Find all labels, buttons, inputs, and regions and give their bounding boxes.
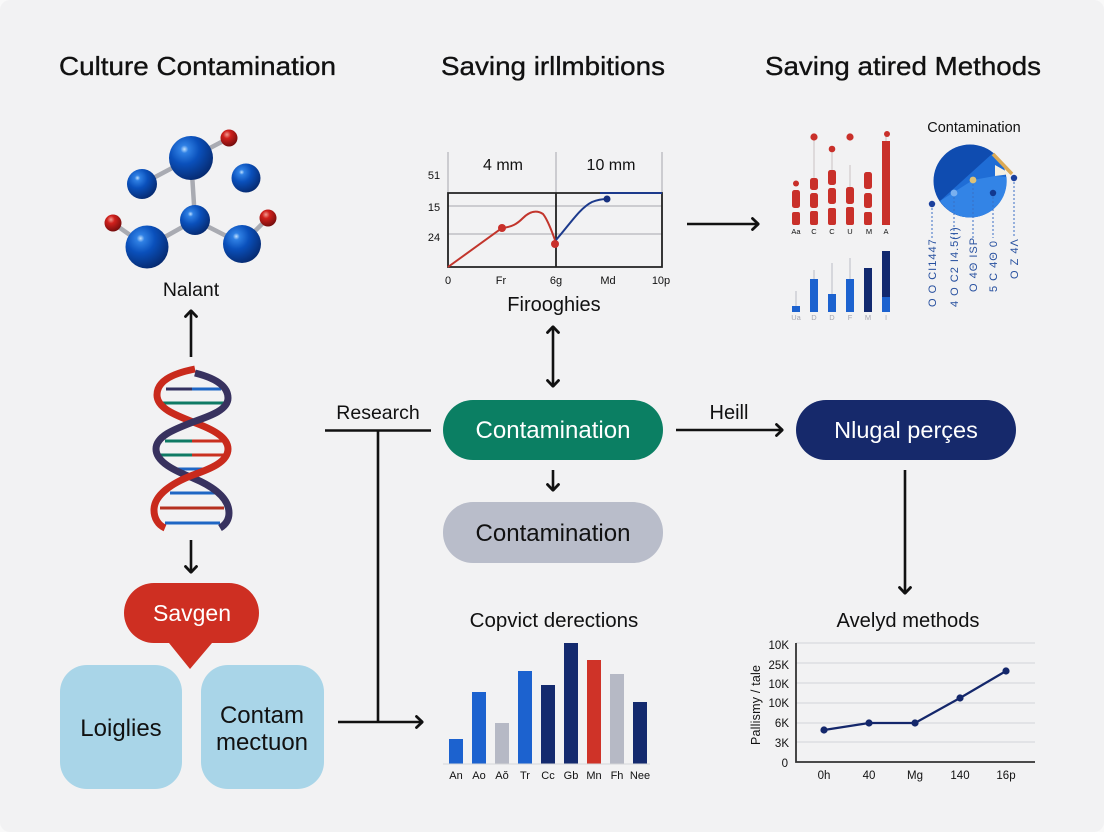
panel: contam mectuon: Contam [220, 702, 304, 729]
line chart: bottom: 0h [818, 770, 830, 782]
line chart: bottom: 10K [769, 679, 789, 691]
arrow: line chart to bar charts [687, 223, 759, 225]
bar chart: blue stacked: Ua [791, 313, 802, 322]
bar chart: blue stacked: M [865, 313, 871, 322]
node: contamination green: Contamination [476, 417, 630, 444]
panel: contam mectuon [201, 665, 324, 789]
line chart: bottom: Pallismy / tale [749, 665, 763, 745]
line chart: bottom: Mg [907, 770, 923, 782]
label: research: Research [336, 402, 420, 424]
line chart: bottom: 16p [996, 770, 1016, 782]
bar chart: red segmented: C [811, 227, 817, 236]
bar chart: bottom: Aŏ [495, 770, 509, 782]
bar chart: bottom: Cc [541, 770, 555, 782]
bar chart: red segmented: A [883, 227, 889, 236]
line chart: thickness: Firooghies [507, 294, 601, 316]
line chart: bottom: 0 [782, 758, 788, 770]
bar chart: blue stacked: D [829, 313, 835, 322]
line chart: bottom: 25K [769, 660, 789, 672]
icon: molecule [104, 130, 276, 268]
bar chart: bottom: An [449, 770, 463, 782]
bar chart: red segmented: U [847, 227, 853, 236]
line chart: thickness: 51 [428, 170, 440, 182]
node: navy: Nlugal perçes [834, 417, 978, 443]
line chart: thickness: 4 mm [483, 157, 523, 174]
bar chart: blue stacked: D [811, 313, 817, 322]
arrow: dna to molecule [190, 310, 192, 357]
arrow: double headed [552, 326, 554, 387]
bar chart: blue stacked: F [848, 313, 853, 322]
bar chart: bottom: Nee [630, 770, 650, 782]
node: navy [796, 400, 1016, 460]
pie chart: contamination [927, 120, 1021, 307]
pie chart: contamination: Contamination [927, 120, 1021, 136]
line chart: thickness: 24 [428, 232, 440, 244]
title: culture contamination: Culture Contamination [59, 51, 336, 81]
arrow: navy to line chart [904, 470, 906, 594]
node: contamination gray [443, 502, 663, 563]
bar chart: bottom [443, 643, 650, 782]
pie chart: contamination: O O CI1447 [927, 238, 939, 307]
arrow: green to navy [676, 429, 783, 431]
bar chart: bottom: Gb [564, 770, 578, 782]
pie chart: contamination: O 4Θ ISP [968, 237, 980, 292]
pie chart: contamination: O Z 4Λ [1009, 238, 1021, 279]
bar chart: blue stacked [791, 251, 890, 322]
line chart: thickness [428, 152, 670, 316]
bar chart: red segmented [791, 131, 890, 236]
title: saving methods: Saving atired Methods [765, 51, 1041, 81]
panel: loiglies [60, 665, 182, 789]
pie chart: contamination: 5 C 4Θ 0 [988, 240, 1000, 292]
icon: dna helix [154, 369, 229, 528]
line chart: bottom: 6K [775, 718, 789, 730]
line chart: bottom: 10K [769, 640, 789, 652]
node: contamination green [443, 400, 663, 460]
line chart: thickness: 0 [445, 275, 451, 287]
label: molecule: Nalant [163, 279, 220, 301]
line chart: bottom [749, 640, 1035, 782]
line chart: bottom: 140 [950, 770, 970, 782]
bar chart: red segmented: M [866, 227, 872, 236]
bar chart: bottom: Ao [472, 770, 486, 782]
bar chart: blue stacked: I [885, 313, 887, 322]
panel: contam mectuon: mectuon [216, 729, 308, 756]
line chart: thickness: 10p [652, 275, 670, 287]
bar chart: bottom: Tr [520, 770, 530, 782]
bar chart: bottom: Fh [611, 770, 623, 782]
callout: red bubble [124, 583, 259, 669]
line chart: bottom: 3K [775, 738, 789, 750]
label: heill: Heill [710, 402, 748, 424]
line chart: thickness: 6g [550, 275, 562, 287]
line chart: thickness: 10 mm [587, 157, 635, 174]
bar chart: bottom: Mn [586, 770, 602, 782]
line chart: bottom: 40 [863, 770, 875, 782]
title: saving inhibitions: Saving irllmbitions [441, 51, 665, 81]
bar chart: red segmented: C [829, 227, 835, 236]
pie chart: contamination: 4 O C2 I4.5(I) [949, 226, 961, 307]
arrow: research connector [325, 430, 431, 722]
callout: red bubble: Savgen [153, 600, 231, 626]
line chart: thickness: 15 [428, 202, 440, 214]
line chart: thickness: Md [600, 275, 616, 287]
heading: bar chart: Copvict derections [470, 609, 638, 632]
line chart: bottom: 10K [769, 698, 789, 710]
heading: line chart: Avelyd methods [836, 610, 980, 632]
arrow: green to gray [552, 470, 554, 491]
arrow: dna to speech bubble [190, 540, 192, 573]
node: contamination gray: Contamination [476, 520, 630, 547]
bar chart: red segmented: Aa [791, 227, 801, 236]
panel: loiglies: Loiglies [80, 715, 162, 742]
line chart: thickness: Fr [496, 275, 507, 287]
